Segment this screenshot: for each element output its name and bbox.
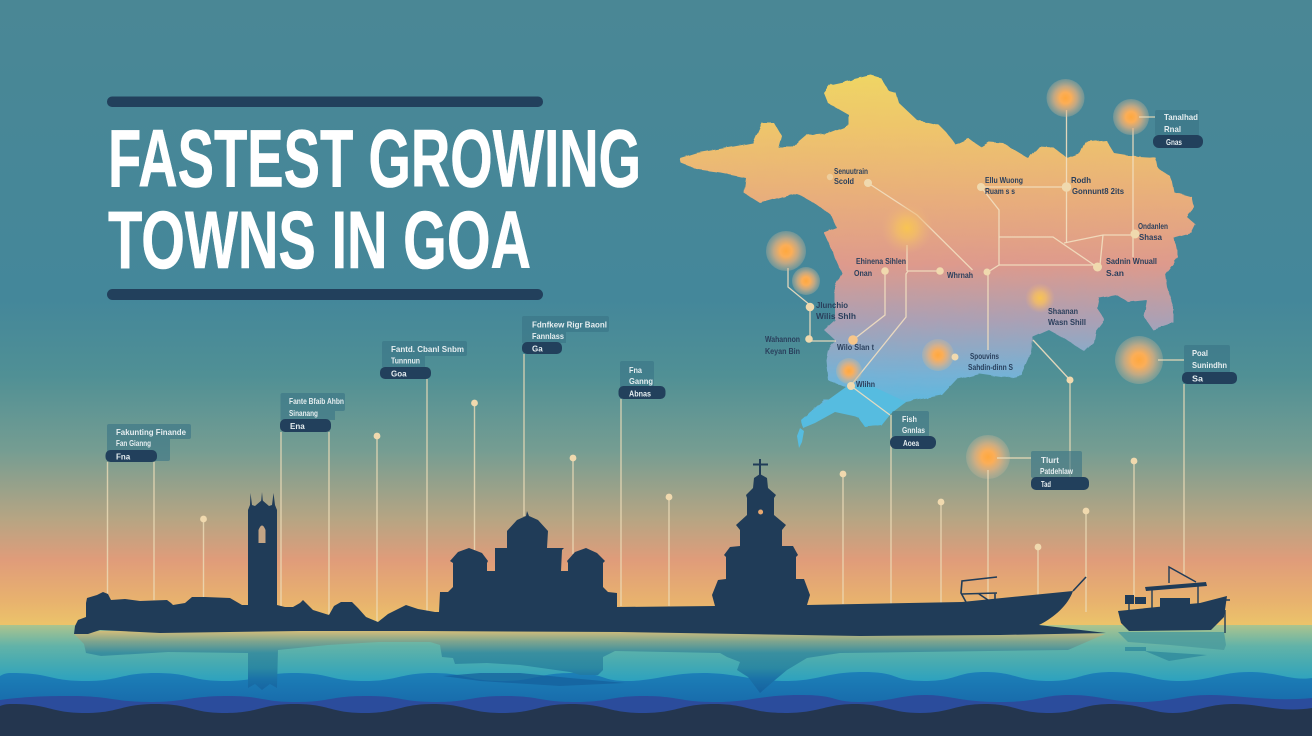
title rule bottom (107, 289, 543, 300)
map town labels: Gonnunt8 2its (1072, 186, 1124, 196)
callout 8: Sunindhn (1192, 360, 1227, 370)
map town labels: Scold (834, 176, 854, 186)
callout 3 (380, 341, 467, 379)
glow: west coast small (792, 267, 820, 295)
map town labels: Shasa (1139, 232, 1162, 242)
map town labels: Wilo Slan t (837, 342, 874, 352)
map town labels: Senuutrain (834, 166, 868, 176)
map town labels: Shaanan (1048, 306, 1078, 316)
callout 8 (1182, 345, 1237, 384)
map town labels: Sadnin Wnuall (1106, 256, 1157, 266)
callout 9: Gnas (1166, 138, 1182, 147)
callout 9 (1153, 110, 1203, 148)
map town labels: S.an (1106, 268, 1124, 278)
callout 6 (890, 411, 936, 449)
map connector network (788, 110, 1135, 415)
callout 2: Ena (290, 422, 305, 431)
callout 8: Poal (1192, 348, 1208, 358)
map town labels (765, 166, 1168, 389)
glow: below map (966, 435, 1010, 479)
skyline silhouette (74, 459, 1106, 636)
callout 9: Rnal (1164, 124, 1181, 134)
glow: top right (1113, 99, 1149, 135)
map town labels: Sahdin-dinn S (968, 362, 1013, 372)
callout 5: Fna (629, 365, 642, 375)
map town labels: Wlihn (856, 379, 875, 389)
callout 4: Fdnfkew Rigr Baonl (532, 320, 607, 330)
callout 1: Fakunting Finande (116, 427, 186, 437)
title: FASTEST GROWING (108, 114, 641, 204)
callout 7: Tad (1041, 480, 1051, 489)
callout 7: Patdehlaw (1040, 466, 1073, 476)
callout 3: Fantd. Cbanl Snbm (391, 344, 464, 354)
glow: map south-west (836, 358, 862, 384)
map of Goa (680, 75, 1196, 448)
callout 7: Tlurt (1041, 455, 1059, 465)
map town labels: Spouvins (970, 351, 999, 361)
map town labels: Whrnah (947, 270, 973, 280)
callout 7 (1031, 451, 1089, 490)
wave band: mid blue (0, 672, 1312, 736)
callout 4: Fannlass (532, 331, 564, 341)
callout 6: Gnnlas (902, 425, 925, 435)
map town labels: Onan (854, 268, 872, 278)
callout 8: Sa (1192, 374, 1204, 384)
callout 5: Ganng (629, 376, 653, 386)
callout 4 (522, 316, 609, 354)
callout 2: Fante Bfaib Ahbn (289, 396, 344, 406)
callout 1: Fan Gianng (116, 438, 151, 448)
map town labels: Ehinena Sihlen (856, 256, 906, 266)
wave band: dark foreground (0, 704, 1312, 736)
callout 6: Aoea (903, 439, 919, 448)
pin lines from skyline (108, 117, 1184, 622)
glow: west coast large (766, 231, 806, 271)
fishing boat (1118, 567, 1230, 633)
glow: outside right (1115, 336, 1163, 384)
reflection on water (74, 631, 1226, 693)
wave band: indigo (0, 695, 1312, 736)
callout 3: Tunnnun (391, 356, 420, 366)
map town labels: Ondanlen (1138, 221, 1168, 231)
title rule top (107, 96, 543, 107)
callout 3: Goa (391, 370, 407, 378)
map town labels: Wilis Shlh (816, 311, 856, 321)
map town labels: Ruam s s (985, 186, 1015, 196)
title (108, 114, 641, 286)
map pins (805, 174, 1140, 390)
map town labels: Ellu Wuong (985, 175, 1023, 185)
callout 5 (618, 361, 666, 399)
glow: map south (922, 339, 954, 371)
glow: map top (1046, 79, 1084, 117)
lollipop pin heads (200, 400, 1137, 550)
water (0, 625, 1312, 685)
glow: map east (1025, 283, 1055, 313)
map town labels: Wasn Shill (1048, 317, 1086, 327)
title: TOWNS IN GOA (108, 195, 531, 286)
callout 5: Abnas (629, 390, 651, 398)
callout 4: Ga (532, 344, 543, 354)
callout 6: Fish (902, 414, 917, 424)
callout 2: Sinanang (289, 408, 318, 418)
glow: map centre (881, 202, 933, 254)
callout 2 (280, 393, 345, 432)
map town labels: Keyan Bin (765, 346, 800, 356)
map town labels: Jlunchio (816, 300, 848, 310)
callout 1: Fna (116, 452, 131, 462)
map town labels: Rodh (1071, 175, 1091, 185)
callout 1 (106, 424, 191, 462)
map town labels: Wahannon (765, 334, 800, 344)
callout 9: Tanalhad (1164, 112, 1198, 122)
